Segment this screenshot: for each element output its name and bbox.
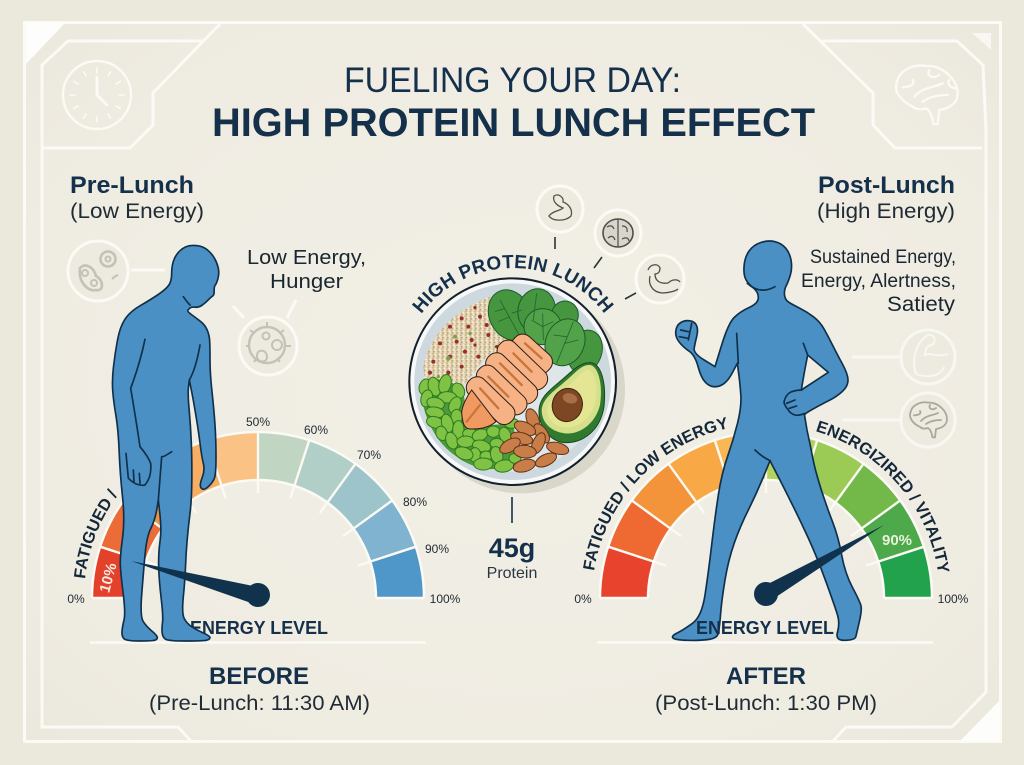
icon: brain outline (842, 393, 955, 447)
text: post-lunch benefits: Satiety (887, 293, 956, 316)
icon: clock (63, 61, 131, 129)
avocado (539, 363, 605, 443)
gauge: before: 100% (430, 592, 461, 606)
label: energy level after: ENERGY LEVEL (696, 618, 834, 638)
spinach (480, 283, 608, 378)
gauge: after (574, 417, 969, 606)
gauge: after: 0% (574, 592, 592, 606)
gauge: after: 90% (882, 532, 912, 549)
needle: before (131, 561, 270, 607)
caption: before: (Pre-Lunch: 11:30 AM) (149, 692, 370, 715)
gauge: after: FATIGUED / LOW ENERGY (583, 417, 726, 570)
protein amount: 45g (489, 533, 535, 563)
icon: flexed arm (636, 255, 684, 303)
gauge: before: 50% (246, 415, 270, 429)
title: FUELING YOUR DAY: (344, 61, 681, 100)
text: low energy symptoms: Hunger (270, 271, 343, 293)
gauge: before: 60% (304, 423, 328, 437)
label: energy level before: ENERGY LEVEL (190, 618, 328, 638)
icon: microbe (233, 300, 297, 375)
heading: pre-lunch: (Low Energy) (70, 200, 204, 223)
gauge: after: 100% (938, 592, 969, 606)
protein amount (487, 497, 537, 582)
gauge: before: 70% (357, 448, 381, 462)
protein amount: Protein (487, 565, 537, 582)
quinoa (423, 297, 512, 388)
text: low energy symptoms (247, 247, 366, 293)
icon: cells (68, 241, 165, 301)
title: HIGH PROTEIN LUNCH EFFECT (212, 101, 815, 145)
plate with food (409, 278, 625, 493)
caption: before (149, 663, 370, 715)
gauge: before (67, 415, 461, 606)
caption: after (655, 663, 877, 715)
heading: pre-lunch: Pre-Lunch (70, 172, 194, 199)
heading: post-lunch: Post-Lunch (818, 172, 955, 199)
baseline rules (90, 641, 933, 644)
needle: after (754, 525, 884, 606)
edamame (417, 373, 521, 474)
gauge: before: FATIGUED / (74, 488, 117, 578)
caption: after: AFTER (726, 663, 806, 690)
almonds (497, 407, 570, 474)
text: post-lunch benefits: Sustained Energy, (810, 247, 956, 268)
gauge: before: 0% (67, 592, 85, 606)
text: low energy symptoms: Low Energy, (247, 247, 366, 269)
text: post-lunch benefits: Energy, Alertness, (801, 271, 956, 292)
gauge: before: 10% (96, 561, 121, 595)
gauge: after: ENERGIZIRED / VITALITY (816, 420, 950, 572)
gauge: before: 90% (425, 542, 449, 556)
chicken (462, 330, 557, 429)
figure: energized person (673, 241, 861, 640)
icon: brain (896, 65, 958, 124)
icon: strong arm (852, 330, 955, 384)
icon: bicep top (537, 186, 636, 299)
heading: pre-lunch (70, 172, 204, 223)
text: post-lunch benefits (801, 247, 956, 316)
caption: after: (Post-Lunch: 1:30 PM) (655, 692, 877, 715)
gauge: before: 80% (403, 495, 427, 509)
heading: post-lunch (817, 172, 955, 223)
plate (409, 278, 625, 493)
icon: brain top (595, 210, 641, 256)
heading: high protein lunch: HIGH PROTEIN LUNCH (412, 254, 614, 314)
caption: before: BEFORE (209, 663, 309, 690)
figure: tired person (112, 245, 219, 641)
title (212, 61, 815, 145)
heading: post-lunch: (High Energy) (817, 200, 955, 223)
